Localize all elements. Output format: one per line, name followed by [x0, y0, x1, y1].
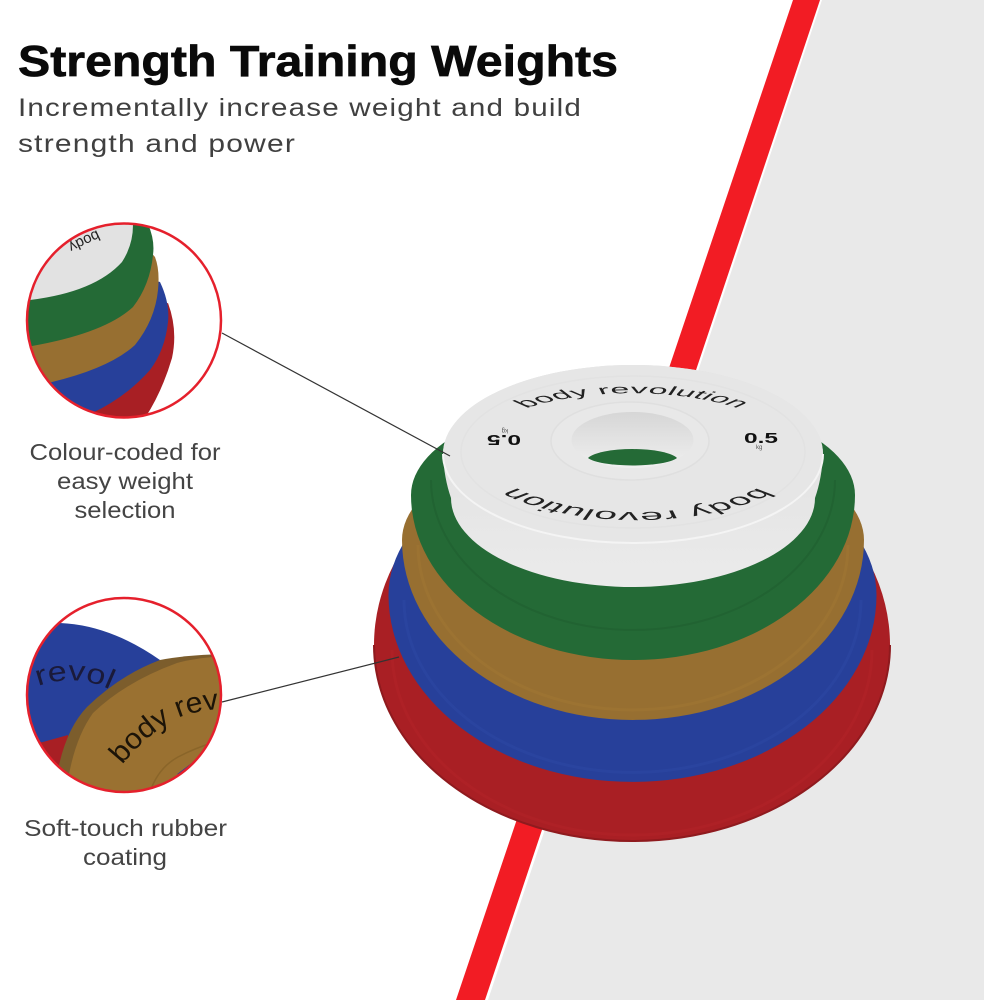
plate: blue — [388, 445, 876, 782]
weight label left — [487, 427, 521, 448]
weight label right: kg — [756, 445, 762, 451]
callout text: rubber coating: coating — [83, 844, 167, 870]
leader line: colour-coded callout — [222, 333, 450, 456]
callout text: colour-coded — [30, 439, 221, 523]
callout text: colour-coded: selection — [74, 497, 176, 523]
centre hole — [572, 412, 694, 468]
background: grey panel — [488, 0, 984, 1000]
callout text: colour-coded: easy weight — [57, 468, 194, 494]
weight label right — [744, 430, 778, 451]
subtitle: strength and power — [18, 130, 296, 158]
plate: white 0.5 — [442, 365, 824, 587]
hub ring — [551, 402, 709, 480]
callout: colour zoom circle: body — [65, 226, 102, 256]
callout: rubber zoom circle: body rev — [108, 694, 217, 764]
weight label left: 0.5 — [487, 431, 521, 448]
background: red diagonal stripe — [456, 0, 820, 1000]
callout text: colour-coded: Colour-coded for — [30, 439, 221, 465]
plate: tan — [402, 435, 864, 720]
brand text: top arc: body revolution — [512, 386, 746, 408]
title: Strength Training Weights — [18, 37, 618, 86]
callout text: rubber coating — [24, 815, 227, 870]
subtitle — [18, 94, 582, 158]
callout: rubber zoom circle — [26, 596, 222, 794]
weight label left: kg — [502, 427, 508, 433]
callout text: rubber coating: Soft-touch rubber — [24, 815, 227, 841]
plate: green — [411, 395, 855, 660]
callout: colour zoom circle — [26, 222, 222, 419]
plate: red — [374, 435, 890, 841]
weight plate stack — [373, 365, 891, 842]
leader line: rubber coating callout — [222, 657, 399, 702]
callout: rubber zoom circle: revol — [36, 665, 116, 688]
weight label right: 0.5 — [744, 430, 778, 447]
brand text: bottom arc: body revolution — [505, 488, 776, 520]
subtitle: Incrementally increase weight and build — [18, 94, 582, 122]
